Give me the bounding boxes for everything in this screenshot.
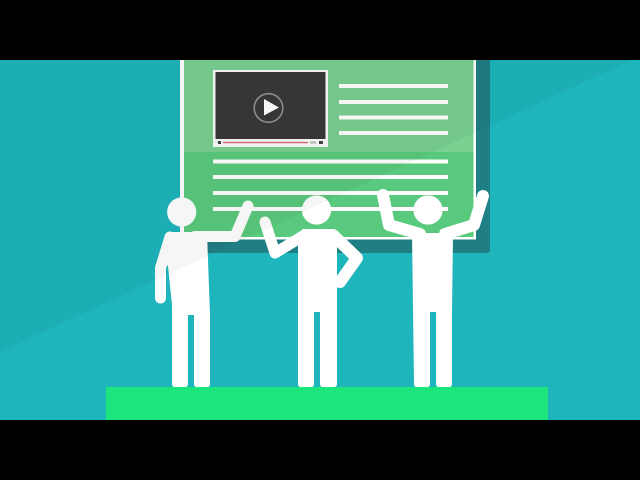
text lines below video <box>213 160 448 211</box>
person: left figure pointing at board <box>160 197 248 387</box>
person: right figure holding up board <box>383 195 483 387</box>
play button <box>254 94 283 122</box>
teal background <box>0 60 640 420</box>
person: middle figure with hand on hip <box>265 195 357 387</box>
diagonal shading overlay <box>0 60 632 352</box>
text lines beside video <box>339 84 448 135</box>
player controls <box>218 141 323 144</box>
video player <box>213 70 328 147</box>
green floor platform <box>106 387 548 420</box>
web page board <box>180 60 476 240</box>
board shadow <box>190 60 490 253</box>
